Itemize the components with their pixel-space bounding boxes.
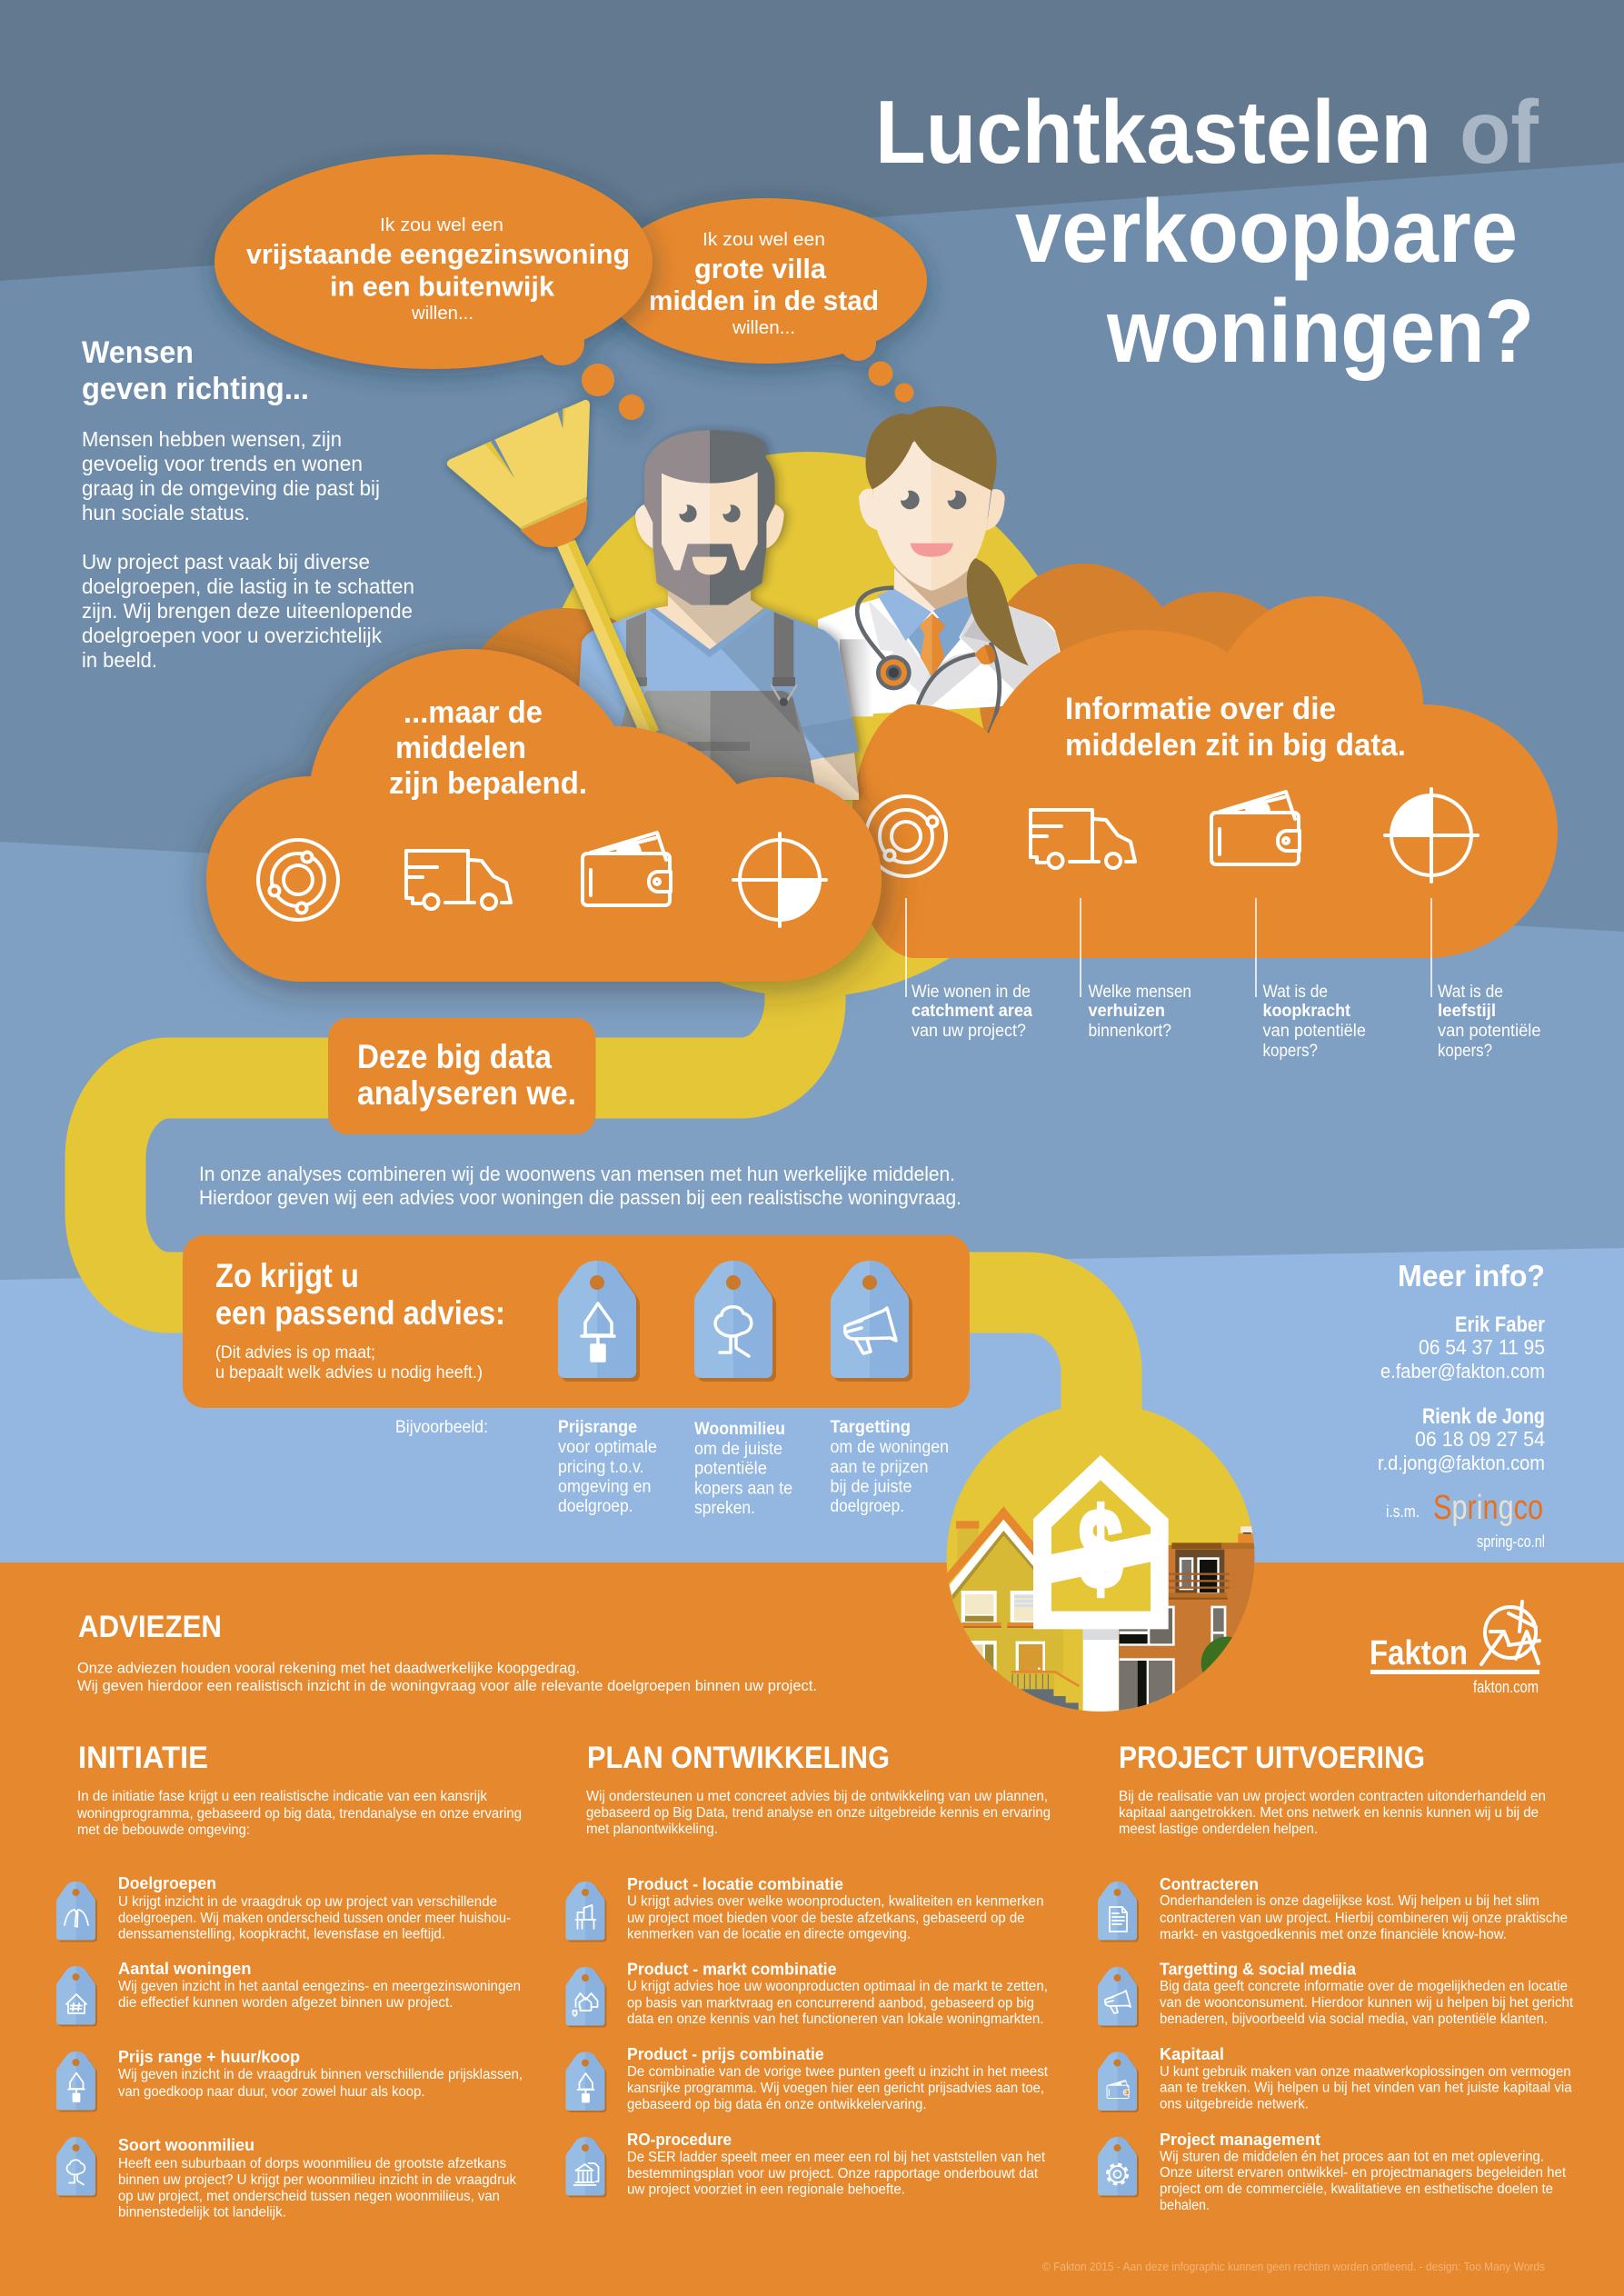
text block: wensen: graag in de omgeving die past bij <box>82 476 380 500</box>
text block: analyses: Hierdoor geven wij een advies voor woningen die passen bij een realistische woningvraag. <box>199 1186 961 1209</box>
text block: bijvoorbeeld <box>395 1418 949 1518</box>
callouts: vragen bij big data: van uw project? <box>912 1022 1026 1041</box>
text block: wensen: Uw project past vaak bij diverse <box>82 550 370 574</box>
icon: tag contracteren <box>1098 1882 1139 1942</box>
text block: bijvoorbeeld: doelgroep. <box>558 1497 633 1516</box>
panel: initiatie: INITIATIE <box>78 1741 208 1775</box>
title: Luchtkastelen <box>875 82 1431 182</box>
title <box>875 82 1539 381</box>
text block: bijvoorbeeld: omgeving en <box>558 1478 651 1496</box>
yellow connecting pipe <box>105 891 1101 1454</box>
panel: initiatie <box>56 1741 523 2220</box>
panel: plan ontwikkeling: Product - markt combinatie <box>627 1960 836 1978</box>
cloud: maar de middelen zijn bepalend: middelen <box>395 731 526 765</box>
panel: project uitvoering: Kapitaal <box>1160 2045 1224 2063</box>
heading: wensen geven richting <box>82 335 309 406</box>
text block: wensen: zijn. Wij brengen deze uiteenlopende <box>82 599 413 623</box>
panel: zo krijgt u een passend advies <box>183 1235 970 1408</box>
callouts: vragen bij big data: verhuizen <box>1089 1002 1165 1021</box>
logo: springco: Springco <box>1433 1489 1543 1527</box>
character: worker <box>575 430 859 800</box>
text block: analyses: In onze analyses combineren wij de woonwens van mensen met hun werkelijke middelen. <box>199 1163 955 1185</box>
text block: bijvoorbeeld: doelgroep. <box>831 1497 904 1516</box>
title: woningen? <box>1106 281 1534 381</box>
panel: project uitvoering: ons uitgebreide netwerk. <box>1160 2097 1309 2112</box>
panel: initiatie: Heeft een suburbaan of dorps woonmilieu de grootste afzetkans <box>118 2156 506 2171</box>
callouts: vragen bij big data: koopkracht <box>1263 1002 1351 1021</box>
speech bubble: vrijstaande eengezinswoning: vrijstaande eengezinswoning <box>246 238 630 270</box>
panel: zo krijgt u een passend advies: (Dit advies is op maat; <box>215 1343 375 1363</box>
panel: plan ontwikkeling: PLAN ONTWIKKELING <box>587 1741 890 1775</box>
panel: initiatie: Aantal woningen <box>118 1960 251 1978</box>
panel: plan ontwikkeling: De SER ladder speelt meer en meer een rol bij het vaststellen van het <box>627 2150 1046 2165</box>
speech bubble: grote villa: willen... <box>732 318 795 338</box>
panel: initiatie: woningprogramma, gebaseerd op big data, trendanalyse en onze ervaring <box>76 1806 522 1822</box>
panel: plan ontwikkeling <box>565 1741 1051 2198</box>
callouts: vragen bij big data: Welke mensen <box>1089 983 1191 1002</box>
box: deze big data analyseren we: Deze big data <box>357 1038 552 1075</box>
panel: project uitvoering: PROJECT UITVOERING <box>1119 1741 1425 1775</box>
icon: tag targetting <box>1098 1967 1139 2027</box>
box: deze big data analyseren we <box>328 1018 596 1134</box>
cloud: informatie over die middelen: Informatie over die <box>1065 692 1336 726</box>
text block: bijvoorbeeld: potentiële <box>694 1460 767 1479</box>
speech bubble: vrijstaande eengezinswoning: in een buitenwijk <box>330 271 555 302</box>
callouts: vragen bij big data: Wat is de <box>1438 983 1503 1002</box>
panel: project uitvoering <box>1098 1741 1574 2213</box>
yellow sun behind characters <box>536 452 1081 997</box>
cloud: informatie over die middelen <box>851 596 1558 958</box>
icon: tag product markt <box>565 1967 607 2027</box>
icon: tag prijsrange <box>558 1261 640 1382</box>
contact: meer info: r.d.jong@fakton.com <box>1378 1452 1545 1474</box>
panel: plan ontwikkeling: De combinatie van de vorige twee punten geeft u inzicht in het meest <box>627 2064 1049 2080</box>
contact: meer info: e.faber@fakton.com <box>1380 1360 1545 1383</box>
icon: wallet <box>1211 792 1300 864</box>
panel: initiatie: In de initiatie fase krijgt u een realistische indicatie van een kansrijk <box>77 1789 487 1804</box>
icon: house sign with dollar: $ <box>1079 1487 1122 1612</box>
callouts: vragen bij big data: van potentiële <box>1263 1022 1366 1041</box>
panel: project uitvoering: behalen. <box>1160 2198 1210 2213</box>
panel: plan ontwikkeling: met planontwikkeling. <box>586 1822 718 1837</box>
panel: project uitvoering: Onderhandelen is onze dagelijkse kost. Wij helpen u bij het slim <box>1160 1893 1539 1909</box>
panel: plan ontwikkeling: gebaseerd op big data én onze ontwikkelervaring. <box>627 2097 927 2112</box>
icon: tag product prijs <box>565 2052 607 2112</box>
text block: bijvoorbeeld: spreken. <box>694 1499 755 1518</box>
text block: wensen: doelgroepen voor u overzichtelijk <box>82 624 382 647</box>
icon: tag aantal woningen <box>56 1966 97 2027</box>
panel: initiatie: op uw project, met onderscheid tussen negen woonmilieus, van <box>118 2189 500 2204</box>
panel: plan ontwikkeling: gebaseerd op Big Data, trend analyse en onze uitgebreide kennis en ervaring <box>586 1805 1051 1821</box>
icon: target <box>1385 789 1478 882</box>
panel: initiatie: Wij geven inzicht in de vraagdruk binnen verschillende prijsklassen, <box>118 2067 523 2082</box>
icon: tag project management <box>1098 2137 1139 2198</box>
panel: project uitvoering: kapitaal aangetrokken. Met ons netwerk en kennis kunnen wij u bij de <box>1119 1805 1539 1821</box>
text block: bijvoorbeeld: Bijvoorbeeld: <box>395 1418 488 1437</box>
panel: project uitvoering: Big data geeft concrete informatie over de mogelijkheden en locatie <box>1160 1979 1568 1994</box>
speech bubble: vrijstaande eengezinswoning: willen... <box>411 304 473 324</box>
heading: wensen geven richting: Wensen <box>82 335 194 370</box>
contact: meer info: Rienk de Jong <box>1422 1404 1545 1429</box>
text block: bijvoorbeeld: Prijsrange <box>558 1418 637 1437</box>
heading: adviezen: Wij geven hierdoor een realistisch inzicht in de woningvraag voor alle relevante doelgroepen binnen uw project. <box>77 1678 817 1694</box>
character: doctor <box>818 406 1061 734</box>
panel: initiatie: U krijgt inzicht in de vraagdruk op uw project van verschillende <box>118 1894 497 1910</box>
icon: truck <box>1031 810 1135 868</box>
cloud: maar de middelen zijn bepalend: zijn bepalend. <box>389 766 587 801</box>
panel: project uitvoering: U kunt gebruik maken van onze maatwerkoplossingen om vermogen <box>1160 2064 1570 2080</box>
panel: project uitvoering: contracteren van uw project. Hierbij combineren wij onze praktische <box>1160 1911 1568 1926</box>
panel: initiatie: binnenstedelijk tot landelijk. <box>118 2205 286 2220</box>
panel: initiatie: Soort woonmilieu <box>118 2136 254 2154</box>
callouts: vragen bij big data: kopers? <box>1438 1042 1492 1061</box>
icon: orbit <box>866 796 946 876</box>
text block: bijvoorbeeld: kopers aan te <box>694 1480 792 1498</box>
speech bubble: grote villa: midden in de stad <box>649 285 879 316</box>
panel: plan ontwikkeling: Product - prijs combinatie <box>627 2045 824 2063</box>
text block: bijvoorbeeld: bij de juiste <box>831 1478 912 1496</box>
house scene circle <box>945 1403 1257 1718</box>
panel: plan ontwikkeling: kenmerken van de locatie en directe omgeving. <box>627 1927 911 1942</box>
panel: zo krijgt u een passend advies: een passend advies: <box>215 1294 505 1332</box>
text block: bijvoorbeeld: om de juiste <box>694 1440 782 1459</box>
panel: project uitvoering: Wij sturen de middelen én het proces aan tot en met oplevering. <box>1160 2149 1544 2165</box>
cloud: maar de middelen zijn bepalend <box>206 649 882 982</box>
panel: plan ontwikkeling: data en onze kennis van het functioneren van lokale woningmarkten. <box>627 2011 1043 2027</box>
panel: project uitvoering: Targetting & social media <box>1160 1961 1357 1979</box>
icon: tag ro-procedure <box>565 2137 607 2198</box>
text block: wensen: in beeld. <box>82 648 157 672</box>
cloud: maar de middelen zijn bepalend: ...maar de <box>404 695 543 730</box>
panel: initiatie: doelgroepen. Wij maken onderscheid tussen onder meer huishou- <box>118 1911 511 1926</box>
panel: project uitvoering: Contracteren <box>1160 1875 1259 1893</box>
panel: plan ontwikkeling: U krijgt advies hoe uw woonproducten optimaal in de markt te zetten, <box>627 1979 1048 1994</box>
panel: initiatie: Prijs range + huur/koop <box>118 2048 300 2066</box>
panel: project uitvoering: Bij de realisatie van uw project worden contracten uitonderhandeld en <box>1119 1789 1546 1804</box>
speech bubble: vrijstaande eengezinswoning: Ik zou wel een <box>380 215 503 235</box>
text block: wensen: doelgroepen, die lastig in te schatten <box>82 574 414 598</box>
cloud: informatie over die middelen: middelen zit in big data. <box>1065 728 1406 763</box>
speech bubble: vrijstaande eengezinswoning <box>214 155 653 420</box>
panel: plan ontwikkeling: uw project voorziet in een regionale behoefte. <box>627 2182 905 2198</box>
title: of <box>1460 82 1539 182</box>
callouts: vragen bij big data: binnenkort? <box>1089 1022 1171 1041</box>
panel: plan ontwikkeling: Product - locatie combinatie <box>627 1875 843 1893</box>
callouts: vragen bij big data: catchment area <box>912 1002 1032 1021</box>
contact: meer info: Meer info? <box>1398 1259 1545 1293</box>
panel: plan ontwikkeling: U krijgt advies over welke woonproducten, kwaliteiten en kenmerken <box>627 1894 1043 1909</box>
icon: house sign with dollar <box>1033 1455 1169 1629</box>
text block: wensen: hun sociale status. <box>82 501 250 524</box>
speech bubble: grote villa <box>605 198 927 402</box>
logo: springco <box>1386 1489 1545 1551</box>
panel: project uitvoering: markt- en vastgoedkennis met onze financiële know-how. <box>1160 1927 1507 1942</box>
panel: plan ontwikkeling: uw project moet bieden voor de beste afzetkans, gebaseerd op de <box>627 1911 1025 1926</box>
logo: fakton <box>1370 1602 1539 1696</box>
panel: project uitvoering: van de woonconsument. Hierdoor kunnen wij u helpen bij het gericht <box>1160 1995 1574 2011</box>
text block: bijvoorbeeld: Targetting <box>831 1418 911 1437</box>
text block: wensen: gevoelig voor trends en wonen <box>82 452 363 475</box>
panel: plan ontwikkeling: op basis van marktvraag en concurrerend aanbod, gebaseerd op big <box>627 1996 1034 2011</box>
callouts: vragen bij big data: leefstijl <box>1438 1002 1496 1021</box>
callouts: vragen bij big data <box>906 898 1541 1061</box>
text block: wensen: Mensen hebben wensen, zijn <box>82 427 342 451</box>
box: deze big data analyseren we: analyseren we. <box>357 1074 576 1112</box>
background clouds <box>461 564 1309 818</box>
icon: target <box>733 834 826 926</box>
panel: initiatie: met de bebouwde omgeving: <box>77 1822 250 1838</box>
panel: initiatie: Doelgroepen <box>118 1874 216 1892</box>
text block: bijvoorbeeld: pricing t.o.v. <box>558 1458 643 1477</box>
text block: wensen <box>82 427 414 672</box>
panel: plan ontwikkeling: kansrijke programma. Wij voegen hier een gericht prijsadvies aan toe, <box>627 2081 1044 2096</box>
title: verkoopbare <box>1015 181 1518 281</box>
panel: zo krijgt u een passend advies: u bepaalt welk advies u nodig heeft.) <box>215 1363 483 1383</box>
heading: adviezen: ADVIEZEN <box>78 1610 222 1644</box>
icon: tag prijs range <box>56 2051 97 2112</box>
panel: initiatie: binnen uw project? U krijgt per woonmilieu inzicht in de vraagdruk <box>118 2172 516 2188</box>
icon: tag doelgroepen <box>56 1882 97 1942</box>
heading: wensen geven richting: geven richting... <box>82 372 309 406</box>
panel: zo krijgt u een passend advies: Zo krijgt u <box>215 1257 359 1294</box>
callouts: vragen bij big data: van potentiële <box>1438 1022 1541 1041</box>
contact: meer info <box>1378 1259 1545 1474</box>
text block: bijvoorbeeld: Woonmilieu <box>694 1420 785 1439</box>
icon: tag targetting <box>831 1261 912 1382</box>
panel: project uitvoering: project om de commerciële, kwalitatieve en esthetische doelen te <box>1160 2181 1553 2197</box>
panel: initiatie: denssamenstelling, koopkracht, levensfase en leeftijd. <box>118 1927 445 1942</box>
panel: project uitvoering: Onze uiterst ervaren ontwikkel- en projectmanagers begeleiden het <box>1160 2165 1567 2181</box>
panel: project uitvoering: meest lastige onderdelen helpen. <box>1119 1822 1318 1837</box>
icon: orbit <box>258 840 338 920</box>
heading: adviezen <box>77 1610 817 1694</box>
panel: initiatie: die effectief kunnen worden afgezet binnen uw project. <box>118 1995 453 2011</box>
copyright: © Fakton 2015 - Aan deze infographic kunnen geen rechten worden ontleend. - design: Too Many Words <box>1042 2260 1545 2273</box>
logo: springco: spring-co.nl <box>1477 1532 1545 1551</box>
broom <box>447 400 659 736</box>
logo: springco: i.s.m. <box>1386 1502 1420 1521</box>
panel: initiatie: Wij geven inzicht in het aantal eengezins- en meergezinswoningen <box>118 1979 521 1994</box>
speech bubble: grote villa: Ik zou wel een <box>702 230 825 250</box>
icon: truck <box>406 851 511 909</box>
contact: meer info: Erik Faber <box>1455 1313 1545 1337</box>
icon: tag soort woonmilieu <box>56 2137 97 2198</box>
logo: fakton: fakton.com <box>1473 1678 1539 1696</box>
callouts: vragen bij big data: kopers? <box>1263 1042 1318 1061</box>
callouts: vragen bij big data: Wie wonen in de <box>912 983 1031 1002</box>
text block: bijvoorbeeld: om de woningen <box>831 1438 949 1457</box>
contact: meer info: 06 54 37 11 95 <box>1419 1335 1545 1359</box>
callouts: vragen bij big data: Wat is de <box>1263 983 1328 1002</box>
panel: plan ontwikkeling: Wij ondersteunen u met concreet advies bij de ontwikkeling van uw plannen, <box>586 1789 1048 1804</box>
icon: tag kapitaal <box>1098 2052 1139 2112</box>
panel: plan ontwikkeling: bestemmingsplan voor uw project. Onze rapportage onderbouwt dat <box>627 2166 1039 2181</box>
speech bubble: grote villa: grote villa <box>694 253 827 285</box>
panel: initiatie: van goedkoop naar duur, voor zowel huur als koop. <box>118 2084 425 2100</box>
text block: bijvoorbeeld: voor optimale <box>558 1438 657 1457</box>
panel: project uitvoering: Project management <box>1160 2131 1320 2149</box>
text block: bijvoorbeeld: aan te prijzen <box>831 1458 929 1477</box>
icon: tag product locatie <box>565 1882 607 1942</box>
panel: project uitvoering: benaderen, bijvoorbeeld via social media, van potentiële klanten. <box>1160 2011 1548 2027</box>
text block: analyses <box>199 1163 961 1209</box>
icon: tag woonmilieu <box>694 1261 776 1382</box>
panel: project uitvoering: aan te trekken. Wij helpen u bij het vinden van het juiste kapitaal via <box>1160 2081 1572 2096</box>
icon: wallet <box>583 833 671 905</box>
logo: fakton: Fakton <box>1370 1634 1468 1672</box>
panel: plan ontwikkeling: RO-procedure <box>627 2131 732 2149</box>
contact: meer info: 06 18 09 27 54 <box>1415 1427 1545 1451</box>
heading: adviezen: Onze adviezen houden vooral rekening met het daadwerkelijke koopgedrag. <box>77 1660 580 1676</box>
